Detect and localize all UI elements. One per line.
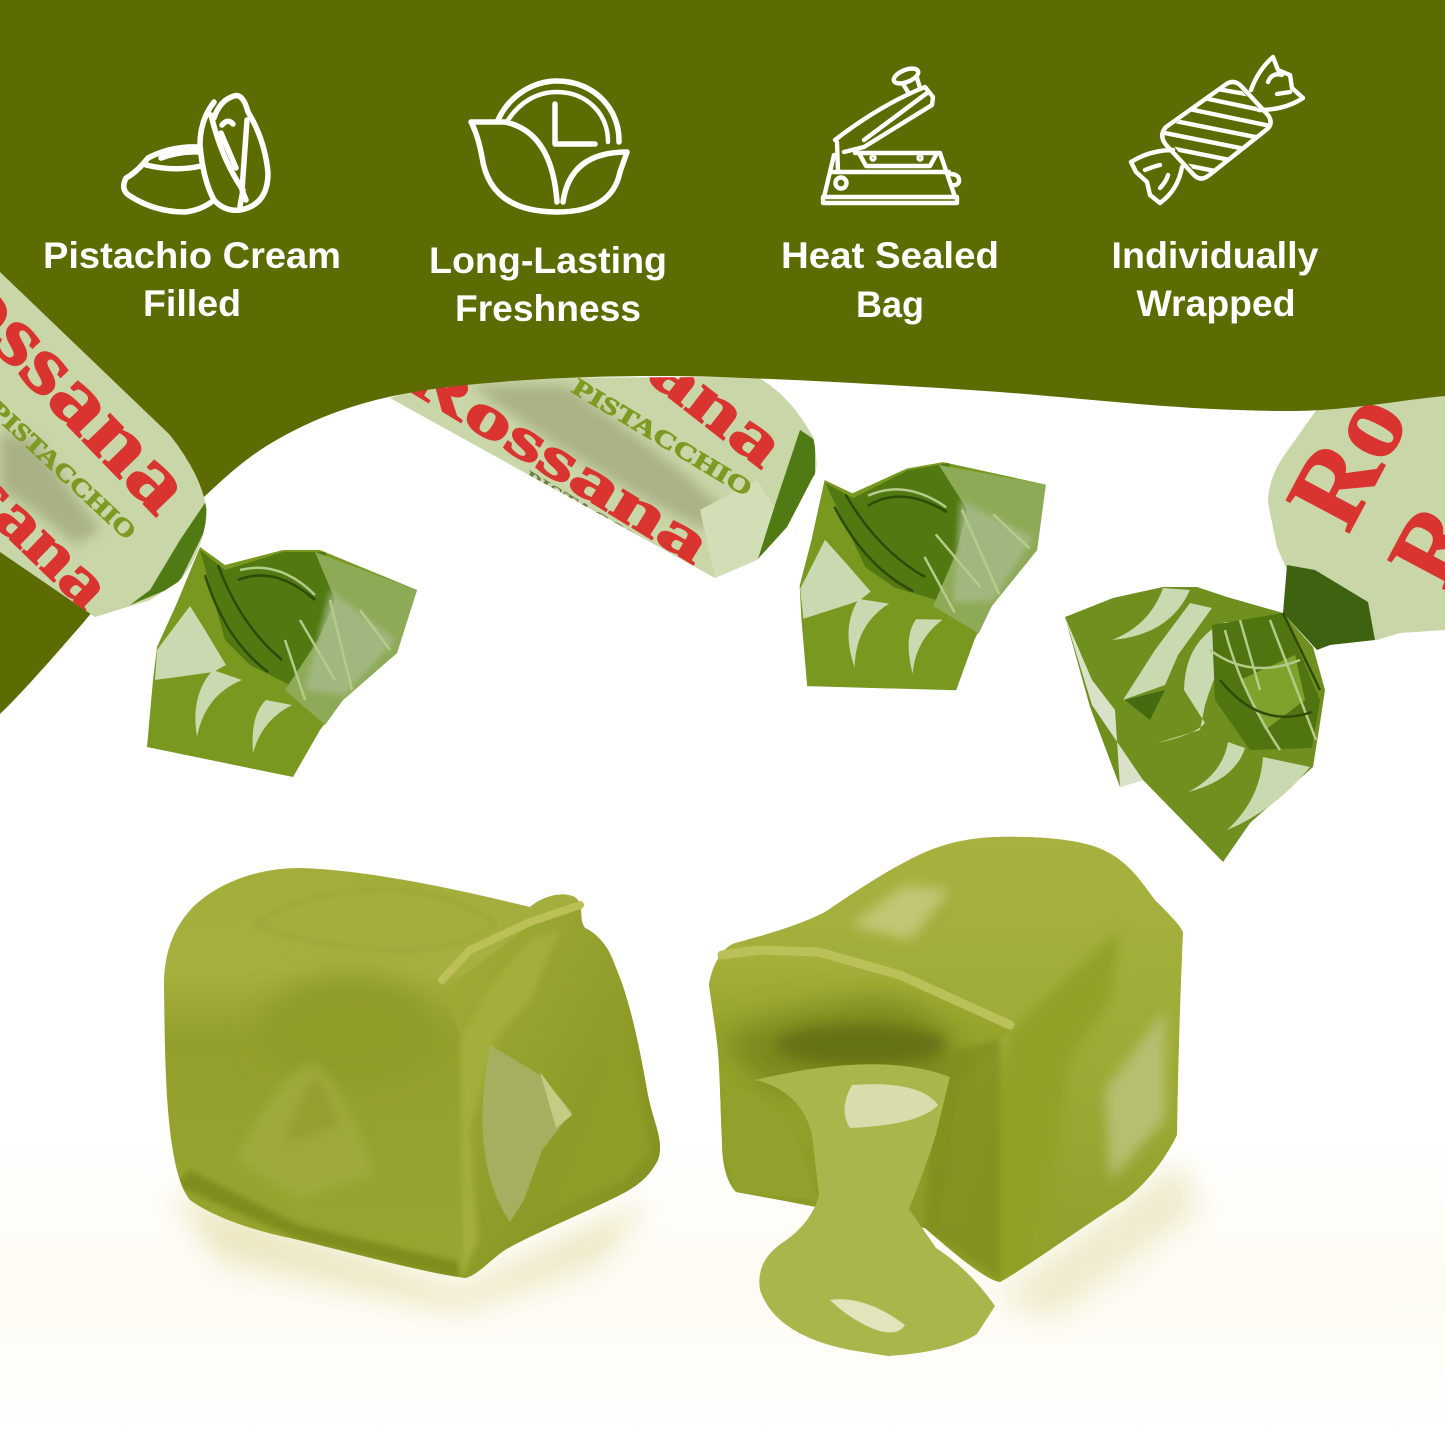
- candy: left wrapped candy: [0, 200, 417, 777]
- feature: pistachio cream filled: [43, 96, 341, 324]
- body details left: [0, 297, 206, 611]
- wrapper twist middle: [772, 442, 1078, 716]
- candy: right wrapped candy: [1065, 374, 1445, 862]
- body details right: [1286, 405, 1445, 590]
- feature: long-lasting freshness: [429, 81, 667, 329]
- icon: wrapped candy: [1131, 57, 1303, 203]
- right half body: [709, 837, 1183, 1282]
- wrapper twist right: [1065, 587, 1325, 862]
- label: heat sealed bag: Bag: [856, 284, 924, 325]
- label: individually wrapped: Individually: [1112, 235, 1319, 276]
- wrapper twist left: [147, 547, 417, 777]
- left half shading: [175, 890, 670, 1290]
- label: long-lasting freshness: Long-Lasting: [429, 240, 667, 281]
- goo lower shine: [830, 1299, 905, 1332]
- goo highlight: [844, 1084, 938, 1128]
- icon: pistachio: [124, 96, 268, 212]
- right half shading: [700, 885, 1165, 1290]
- shadows under candies: [170, 1160, 1200, 1320]
- body details middle: Rossana: [485, 213, 800, 482]
- feature: individually wrapped: [1112, 57, 1319, 324]
- body details middle: PISTACCHIO: [567, 374, 756, 502]
- body details middle: Rossana: [393, 340, 722, 576]
- wrapper stripes right: [1065, 588, 1320, 830]
- cut candy: left half: [164, 868, 670, 1290]
- cut candy: right half: [700, 837, 1183, 1356]
- candy body middle: [390, 377, 816, 578]
- candy body right: [1268, 395, 1445, 643]
- right half crumb edge: [722, 950, 1010, 1025]
- label: pistachio cream filled: Pistachio Cream: [43, 235, 341, 276]
- label: individually wrapped: Wrapped: [1136, 283, 1296, 324]
- label: long-lasting freshness: Freshness: [455, 288, 641, 329]
- filling goo: [755, 1064, 995, 1356]
- feature: heat sealed bag: [781, 66, 999, 325]
- label: heat sealed bag: Heat Sealed: [781, 235, 999, 276]
- candy: middle wrapped candy: [390, 213, 1078, 716]
- body details middle: PISTACCHIO: [521, 466, 673, 568]
- body details middle: [410, 377, 815, 578]
- right half cut face: [700, 943, 1012, 1240]
- icon: heat sealer: [823, 66, 959, 203]
- left half cut face: [459, 900, 660, 1278]
- candy body left: [0, 272, 207, 617]
- left half crumb edge: [442, 905, 580, 980]
- body details right: Ro: [1264, 374, 1431, 546]
- wrapper neck right: [1283, 565, 1375, 650]
- icon: clock and leaves: [471, 81, 627, 212]
- label: pistachio cream filled: Filled: [143, 283, 241, 324]
- green wave banner: [0, 0, 1445, 714]
- floor tint: [0, 1130, 1445, 1445]
- left half body: [164, 868, 660, 1278]
